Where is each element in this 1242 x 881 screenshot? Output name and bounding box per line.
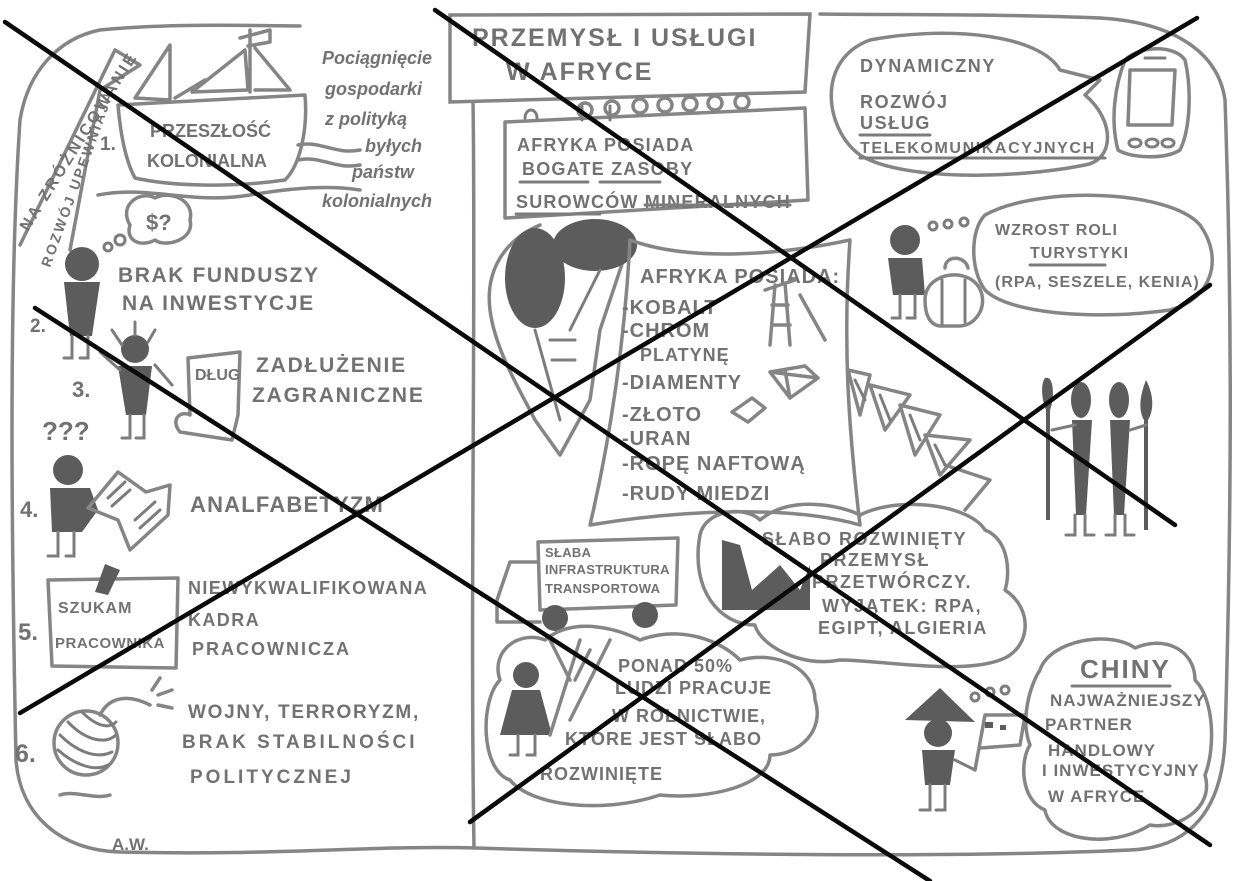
item 2: lack of funds (30, 195, 320, 358)
item 5: unqualified staff: PRACOWNIKA (55, 635, 165, 652)
notebook: mineral resources: AFRYKA POSIADA (517, 135, 694, 155)
truck: weak transport infrastructure: SŁABA (545, 545, 592, 560)
item 3: foreign debt: 3. (72, 377, 90, 402)
cloud: China: I INWESTYCYJNY (1042, 761, 1200, 780)
item 6: wars, bomb: BRAK STABILNOŚCI (182, 731, 418, 753)
item 1: colonial past ship: 1. (100, 134, 116, 155)
item 1: colonial past ship: państw (351, 162, 415, 182)
item 6: wars, bomb (15, 678, 420, 796)
document: Africa possesses: -ROPĘ NAFTOWĄ (622, 453, 806, 475)
cloud: weak processing industry: SŁABO ROZWINIĘTY (762, 529, 967, 549)
cloud: agriculture: W ROLNICTWIE, (612, 706, 766, 726)
truck: weak transport infrastructure: INFRASTRUKTURA (545, 562, 670, 577)
icon: mine tower (765, 280, 825, 345)
cloud: weak processing industry: WYJĄTEK: RPA, (822, 596, 982, 616)
warriors with spears (1042, 378, 1152, 535)
item 1: colonial past ship: byłych (365, 136, 422, 156)
heading: side banner: ROZWÓJ UPEWNIAJĄ (37, 89, 116, 269)
document: Africa possesses: PLATYNĘ (640, 345, 730, 365)
dark balloons (505, 219, 637, 420)
left panel: obstacles (15, 30, 432, 854)
item 4: illiteracy: ??? (42, 416, 90, 446)
notebook: mineral resources: BOGATE ZASOBY (522, 159, 693, 179)
speech bubble: telecommunications: TELEKOMUNIKACYJNYCH (860, 140, 1096, 157)
truck: weak transport infrastructure: TRANSPORTOWA (545, 581, 661, 596)
cloud: China: W AFRYCE (1048, 787, 1145, 806)
item 1: colonial past ship: z polityką (324, 109, 407, 129)
title box (450, 14, 810, 102)
cloud: weak processing industry: PRZETWÓRCZY. (812, 571, 972, 592)
document: Africa possesses: -URAN (622, 428, 691, 450)
item 6: wars, bomb: WOJNY, TERRORYZM, (188, 702, 420, 723)
cloud: China: PARTNER (1045, 715, 1133, 734)
cloud: China: CHINY (1080, 654, 1171, 684)
document: Africa possesses (590, 240, 860, 525)
item 4: illiteracy (20, 416, 384, 556)
bubble: tourism: (RPA, SESZELE, KENIA) (995, 274, 1200, 291)
item 1: colonial past ship: Pociągnięcie (322, 48, 432, 68)
item 2: lack of funds: BRAK FUNDUSZY (118, 264, 320, 287)
document: Africa possesses: -CHROM (622, 320, 710, 342)
bubble: tourism (974, 195, 1212, 315)
cloud: weak processing industry (698, 504, 1025, 667)
cloud: agriculture: ROZWINIĘTE (540, 764, 663, 784)
notebook: mineral resources: SUROWCÓW MINERALNYCH (516, 191, 791, 212)
cloud: weak processing industry: EGIPT, ALGIERIA (818, 618, 988, 638)
truck: weak transport infrastructure (497, 538, 678, 631)
cloud: China: NAJWAŻNIEJSZY (1050, 691, 1206, 710)
document: Africa possesses: -KOBALT (622, 297, 718, 319)
icon: diamond (770, 366, 818, 398)
tourist figure with suitcase (888, 218, 983, 326)
item 6: wars, bomb: POLITYCZNEJ (190, 767, 354, 788)
item 1: colonial past ship: kolonialnych (322, 191, 432, 211)
item 2: lack of funds: NA INWESTYCJE (122, 292, 315, 315)
notebook: mineral resources (505, 95, 808, 218)
speech bubble: telecommunications: USŁUG (860, 113, 931, 133)
document: Africa possesses: AFRYKA POSIADA: (640, 266, 840, 288)
heading: side banner: NA ZRÓŻNICOWANIE (15, 50, 140, 234)
icon: gold bar (732, 398, 765, 422)
title box: W AFRYCE (506, 58, 653, 86)
cloud: agriculture (486, 626, 817, 806)
speech bubble: telecommunications (831, 33, 1108, 175)
speech bubble: telecommunications: ROZWÓJ (860, 91, 949, 112)
item 1: colonial past ship: PRZESZŁOŚĆ (150, 120, 271, 141)
item 4: illiteracy: 4. (20, 497, 38, 522)
map of Africa (489, 225, 630, 455)
cloud: agriculture: PONAD 50% (618, 656, 733, 676)
document: Africa possesses: -RUDY MIEDZI (622, 483, 770, 505)
arc of pages (848, 370, 990, 510)
item 5: unqualified staff: NIEWYKWALIFIKOWANA (188, 578, 428, 598)
document: Africa possesses: -DIAMENTY (622, 372, 742, 394)
item 2: lack of funds: 2. (30, 316, 46, 337)
cloud: agriculture: LUDZI PRACUJE (615, 678, 772, 698)
item 1: colonial past ship (98, 30, 432, 211)
item 1: colonial past ship: KOLONIALNA (147, 151, 267, 171)
cloud: agriculture: KTÓRE JEST SŁABO (565, 728, 762, 749)
cloud: China: HANDLOWY (1048, 741, 1156, 760)
bubble: tourism: WZROST ROLI (995, 222, 1118, 239)
item 5: unqualified staff (18, 564, 428, 668)
cloud: China (1024, 639, 1212, 839)
item 4: illiteracy: ANALFABETYZM (190, 492, 384, 517)
item 3: foreign debt: DŁUG (195, 367, 240, 384)
item 3: foreign debt: ZAGRANICZNE (252, 384, 425, 407)
bubble: tourism: TURYSTYKI (1030, 245, 1129, 262)
item 5: unqualified staff: PRACOWNICZA (192, 639, 351, 659)
speech bubble: telecommunications: DYNAMICZNY (860, 56, 996, 76)
icon: mobile phone (1114, 49, 1189, 157)
cloud: weak processing industry: PRZEMYSŁ (820, 550, 930, 570)
item 5: unqualified staff: 5. (18, 619, 38, 646)
item 6: wars, bomb: 6. (15, 740, 36, 768)
item 5: unqualified staff: SZUKAM (58, 600, 132, 617)
author initials: A.W. (112, 835, 149, 854)
Chinese figure with flag (905, 686, 1025, 810)
item 5: unqualified staff: KADRA (188, 610, 260, 630)
column divider (473, 100, 474, 848)
item 1: colonial past ship: gospodarki (324, 79, 423, 99)
item 3: foreign debt: ZADŁUŻENIE (256, 354, 407, 377)
title box: PRZEMYSŁ I USŁUGI (472, 24, 757, 52)
item 2: lack of funds: $? (146, 210, 172, 235)
item 3: foreign debt (72, 322, 425, 440)
document: Africa possesses: -ZŁOTO (622, 404, 702, 426)
